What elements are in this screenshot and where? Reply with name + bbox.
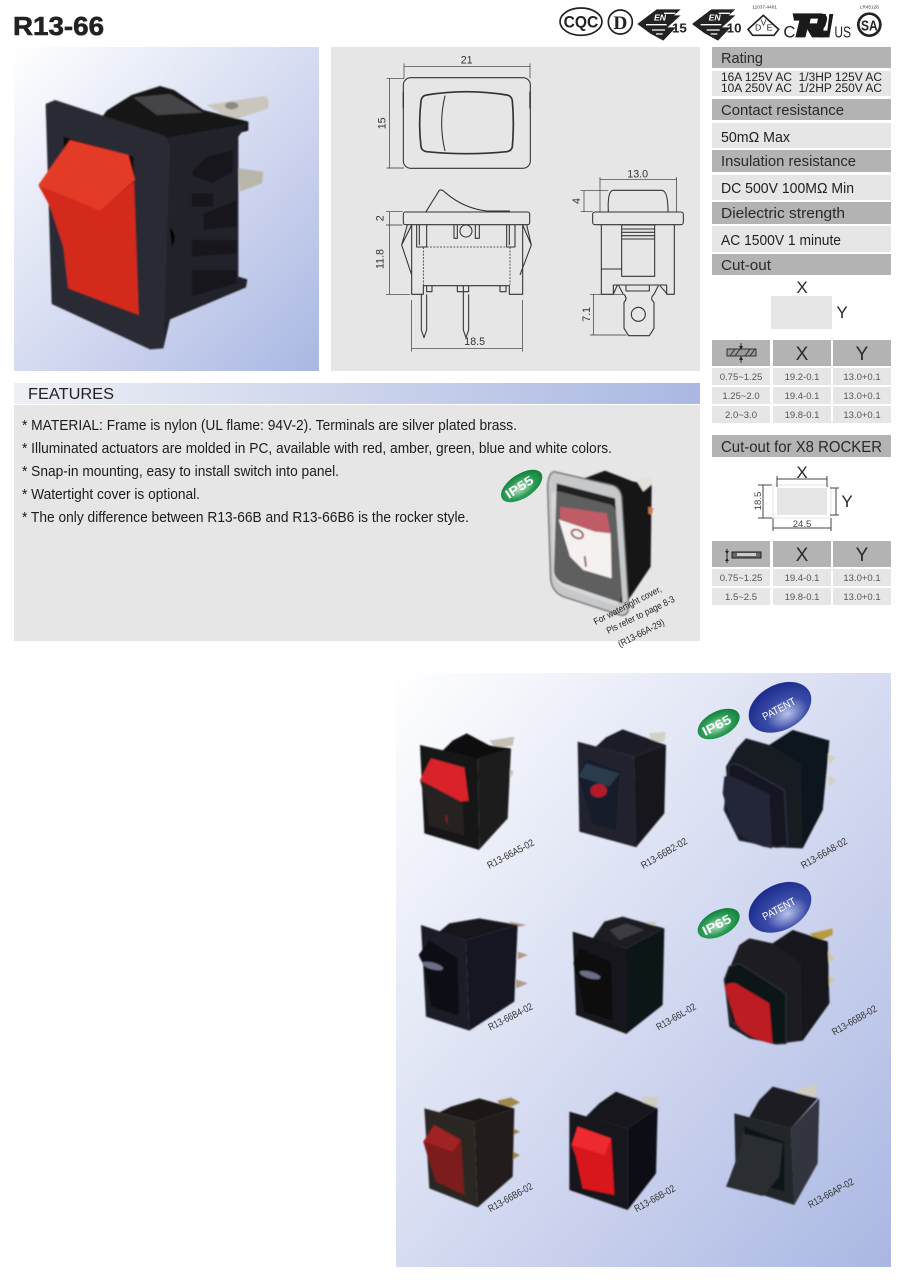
heading: cut-out: Cut-out xyxy=(721,257,772,274)
end view drawing xyxy=(571,169,683,336)
icon: EN 10 mark: 10 xyxy=(727,21,741,36)
icon: panel thickness xyxy=(727,343,756,363)
icon: VDE mark: V xyxy=(761,17,767,27)
side view drawing: 18.5 xyxy=(464,336,485,348)
switch: R13-66L-02: R13-66L-02 xyxy=(655,1002,699,1033)
icon: CSA mark: SA xyxy=(861,19,878,35)
X8 cut-out diagram: Y xyxy=(841,492,853,511)
switch: R13-66AP-02: R13-66AP-02 xyxy=(806,1177,856,1211)
badge: PATENT xyxy=(740,672,820,743)
table: cut-out sizes: Y xyxy=(856,344,869,365)
table: cut-out sizes xyxy=(712,340,891,423)
switch: R13-66B2-02 xyxy=(578,729,690,872)
table: X8 cut-out sizes: 19.8-0.1 xyxy=(785,592,819,603)
switch: R13-66AP-02 xyxy=(726,1083,856,1211)
icon: EN 15 mark: 15 xyxy=(672,21,687,36)
note: watertight cover reference xyxy=(592,584,676,649)
icon: X8 panel thickness xyxy=(725,549,761,563)
icon: CSA mark: LR45128 xyxy=(860,5,879,10)
heading: features xyxy=(14,383,700,404)
switch: R13-66L-02 xyxy=(573,917,699,1034)
side view drawing: 2 xyxy=(374,215,386,221)
spec: insulation resistance: Insulation resistance xyxy=(721,153,856,170)
panel: dimension drawings xyxy=(331,47,700,371)
table: cut-out sizes: 13.0+0.1 xyxy=(843,391,881,402)
waterproof switch with IP55 badge xyxy=(496,463,676,649)
features list xyxy=(22,417,612,526)
table: cut-out sizes: 19.4-0.1 xyxy=(785,391,819,402)
spec: rating: 16A 125V AC 1/3HP 125V AC xyxy=(721,72,882,84)
table: X8 cut-out sizes: X xyxy=(796,545,809,566)
switch: R13-66B4-02: R13-66B4-02 xyxy=(487,1001,535,1033)
cut-out diagram xyxy=(771,278,848,329)
switch: R13-66B6-02: R13-66B6-02 xyxy=(486,1181,535,1215)
X8 cut-out diagram: X xyxy=(796,463,808,482)
end view drawing: 4 xyxy=(571,198,583,204)
table: X8 cut-out sizes: 13.0+0.1 xyxy=(843,592,881,603)
features list: * MATERIAL: Frame is nylon (UL flame: 94V-2). Terminals are silver plated brass. xyxy=(22,417,517,434)
table: cut-out sizes: 2.0~3.0 xyxy=(725,410,757,421)
badge: PATENT: PATENT xyxy=(761,895,798,923)
icon: switch with watertight cover xyxy=(548,471,653,615)
X8 cut-out diagram xyxy=(753,463,853,531)
table: X8 cut-out sizes xyxy=(712,541,891,605)
icon: EN 15 mark xyxy=(637,9,687,41)
switch: R13-66B2-02: R13-66B2-02 xyxy=(639,836,690,872)
badge: IP65 xyxy=(693,902,745,945)
badge: IP55 xyxy=(496,463,548,509)
table: X8 cut-out sizes: 13.0+0.1 xyxy=(843,573,881,584)
icon: EN 15 mark: EN xyxy=(654,13,667,23)
spec: rating: 10A 250V AC 1/2HP 250V AC xyxy=(721,83,882,95)
spec: dielectric strength: Dielectric strength xyxy=(721,205,845,222)
end view drawing: 7.1 xyxy=(581,307,593,322)
panel: specifications xyxy=(712,47,891,605)
spec: dielectric strength: AC 1500V 1 minute xyxy=(721,232,841,249)
table: cut-out sizes: 19.8-0.1 xyxy=(785,410,819,421)
badge: PATENT: PATENT xyxy=(761,695,798,723)
switch: R13-66A5-02 xyxy=(420,733,537,872)
table: cut-out sizes: 0.75~1.25 xyxy=(720,372,762,383)
switch: R13-66B6-02 xyxy=(423,1097,535,1215)
badge: PATENT xyxy=(740,872,820,943)
panel: product gallery xyxy=(396,672,891,1267)
badge: IP55: IP55 xyxy=(503,473,536,502)
top row of switches xyxy=(420,672,850,872)
table: X8 cut-out sizes: 0.75~1.25 xyxy=(720,573,762,584)
features list: * Illuminated actuators are molded in PC, available with red, amber, green, blue and white colors. xyxy=(22,440,612,457)
switch: R13-66B8-02 xyxy=(693,872,879,1044)
icon: CQC mark xyxy=(560,8,602,35)
note: watertight cover reference: (R13-66A-29) xyxy=(616,617,666,649)
table: X8 cut-out sizes: Y xyxy=(856,545,869,566)
spec: contact resistance: Contact resistance xyxy=(721,102,844,119)
badge: IP65 xyxy=(693,702,745,746)
icon: VDE mark: 11037-4401 xyxy=(752,5,777,10)
top view drawing: 15 xyxy=(377,117,389,129)
table: X8 cut-out sizes: 19.4-0.1 xyxy=(785,573,819,584)
icon: UR mark: US xyxy=(834,24,851,41)
icon: VDE mark: E xyxy=(767,23,773,33)
end view drawing: 13.0 xyxy=(627,169,648,181)
certification logos xyxy=(560,5,880,41)
switch: R13-66B-02: R13-66B-02 xyxy=(633,1183,678,1215)
note: watertight cover reference: Pls refer to page 8-3 xyxy=(605,594,676,636)
icon: CSA mark xyxy=(858,5,880,36)
X8 cut-out diagram: 18.5 xyxy=(753,492,764,510)
icon: red rocker switch xyxy=(38,86,269,349)
X8 cut-out diagram: 24.5 xyxy=(793,519,811,530)
cut-out diagram: X xyxy=(796,278,808,297)
title: R13-66 xyxy=(13,11,104,41)
icon: VDE mark: D xyxy=(755,23,761,33)
switch: R13-66A5-02: R13-66A5-02 xyxy=(486,837,537,872)
table: cut-out sizes: 13.0+0.1 xyxy=(843,410,881,421)
spec: dielectric strength xyxy=(712,202,891,252)
icon: UR mark: C xyxy=(783,22,795,41)
note: watertight cover reference: For waterfight cover, xyxy=(592,584,663,627)
icon: UR mark xyxy=(783,13,851,41)
lower rows of switches xyxy=(419,872,879,1215)
switch: R13-66B-02 xyxy=(569,1092,678,1215)
icon: CQC mark: CQC xyxy=(564,13,598,32)
heading: cut-out for X8 rocker: Cut-out for X8 ROCKER xyxy=(721,439,882,456)
table: cut-out sizes: 1.25~2.0 xyxy=(722,391,760,402)
icon: VDE mark xyxy=(748,5,779,35)
switch: R13-66B8-02: R13-66B8-02 xyxy=(830,1004,879,1038)
cut-out diagram: Y xyxy=(836,303,848,322)
table: X8 cut-out sizes: 1.5~2.5 xyxy=(725,592,757,603)
badge: IP65: IP65 xyxy=(700,912,734,938)
spec: contact resistance: 50mΩ Max xyxy=(721,129,790,146)
switch: R13-66A8-02: R13-66A8-02 xyxy=(799,836,850,872)
top view drawing xyxy=(377,55,530,168)
badge: IP65: IP65 xyxy=(700,713,734,739)
top view drawing: 21 xyxy=(461,55,473,67)
heading: cut-out xyxy=(712,254,891,275)
panel: features xyxy=(14,383,700,649)
table: cut-out sizes: 19.2-0.1 xyxy=(785,372,819,383)
spec: contact resistance xyxy=(712,99,891,148)
heading: features: FEATURES xyxy=(28,386,114,403)
switch: R13-66A8-02 xyxy=(693,672,850,872)
table: cut-out sizes: 13.0+0.1 xyxy=(843,372,881,383)
icon: EN 10 mark: EN xyxy=(709,13,721,23)
side view drawing: 11.8 xyxy=(374,249,386,269)
side view drawing xyxy=(374,190,531,352)
table: cut-out sizes: X xyxy=(796,344,809,365)
switch: R13-66B4-02 xyxy=(419,918,535,1033)
spec: insulation resistance: DC 500V 100MΩ Min xyxy=(721,180,854,197)
panel: product photo xyxy=(14,47,319,371)
spec: rating: Rating xyxy=(721,50,763,67)
features list: * The only difference between R13-66B and R13-66B6 is the rocker style. xyxy=(22,509,469,526)
features list: * Snap-in mounting, easy to install switch into panel. xyxy=(22,463,339,480)
icon: D mark xyxy=(608,10,632,34)
icon: D mark: D xyxy=(613,13,627,34)
spec: rating xyxy=(712,47,891,96)
icon: EN 10 mark xyxy=(692,9,741,41)
spec: insulation resistance xyxy=(712,150,891,200)
features list: * Watertight cover is optional. xyxy=(22,486,200,503)
